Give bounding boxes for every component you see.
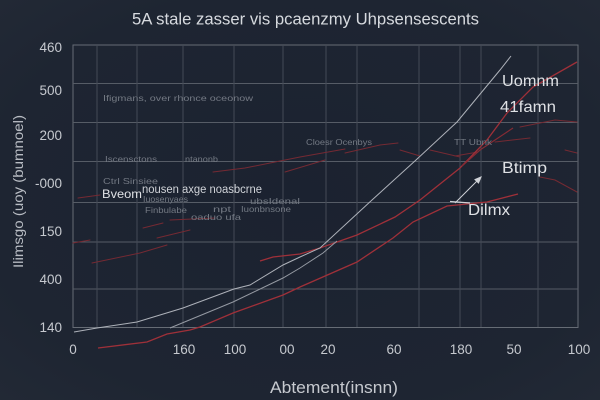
plot grid <box>73 45 578 328</box>
x axis labels <box>69 342 590 357</box>
annotation: right labels: 41famn <box>500 99 556 116</box>
y axis labels: 140 <box>39 320 62 335</box>
white line: main series <box>74 56 511 332</box>
x axis labels: 100 <box>568 342 590 357</box>
annotation: overlay label <box>102 184 262 201</box>
y axis labels: 460 <box>39 40 62 55</box>
faint annotation text: Iuonbnsone <box>241 204 291 214</box>
faint annotation text: Cloesr Ocenbys <box>306 137 372 147</box>
annotation: right labels: Uomnm <box>502 73 559 90</box>
x axis labels: 50 <box>506 342 522 357</box>
faint annotation text: Ifigmans, over rhonce oceonow <box>103 93 254 103</box>
faint annotation text: Iscensctons <box>105 154 157 164</box>
y axis labels: 500 <box>39 83 62 98</box>
y axis title: Ilimsgo (uoy (bumnoel) <box>10 115 26 268</box>
faint annotation text: oaduo ufa <box>191 212 241 222</box>
red line: lower series <box>98 194 518 348</box>
y axis labels: -000 <box>35 176 62 191</box>
x axis labels: 0 <box>69 342 77 357</box>
x axis labels: 00 <box>279 342 295 357</box>
faint annotation text: Finbulabe <box>145 205 187 215</box>
annotation: overlay label: Bveom <box>102 187 142 201</box>
annotation: right labels: Btimp <box>502 160 547 177</box>
faint annotation text: ubsIdenal <box>250 196 300 206</box>
red line: branch <box>462 128 513 166</box>
faint annotation text: ntanonb <box>185 154 218 164</box>
faint annotation text: npt <box>213 204 232 214</box>
annotation: right labels: Dilmx <box>468 202 510 219</box>
y axis labels: 200 <box>39 128 62 143</box>
faint annotation text: Iuosenyaes <box>143 194 188 204</box>
title: 5A stale zasser vis pcaenzmy Uhpsensescents <box>132 10 479 28</box>
x axis labels: 60 <box>386 342 402 357</box>
red line: upper series <box>260 62 577 261</box>
faint annotation text: Ctrl Sinsiee <box>103 176 158 186</box>
x axis labels: 20 <box>320 342 336 357</box>
annotation: right labels <box>468 73 559 219</box>
x axis labels: 180 <box>450 342 472 357</box>
y axis labels <box>35 40 62 335</box>
y axis labels: 400 <box>39 272 62 287</box>
y axis labels: 150 <box>39 224 62 239</box>
arrow <box>450 177 481 203</box>
x axis title: Abtement(insnn) <box>270 378 398 397</box>
white line: second series <box>170 241 337 328</box>
faint annotation text: TT Ubnk <box>454 137 493 147</box>
x axis labels: 100 <box>224 342 246 357</box>
faint red trend fragments <box>73 120 577 263</box>
x axis labels: 160 <box>173 342 195 357</box>
annotation: overlay label: nousen axge noasbcrne <box>142 184 262 196</box>
faint annotation text <box>103 93 493 222</box>
